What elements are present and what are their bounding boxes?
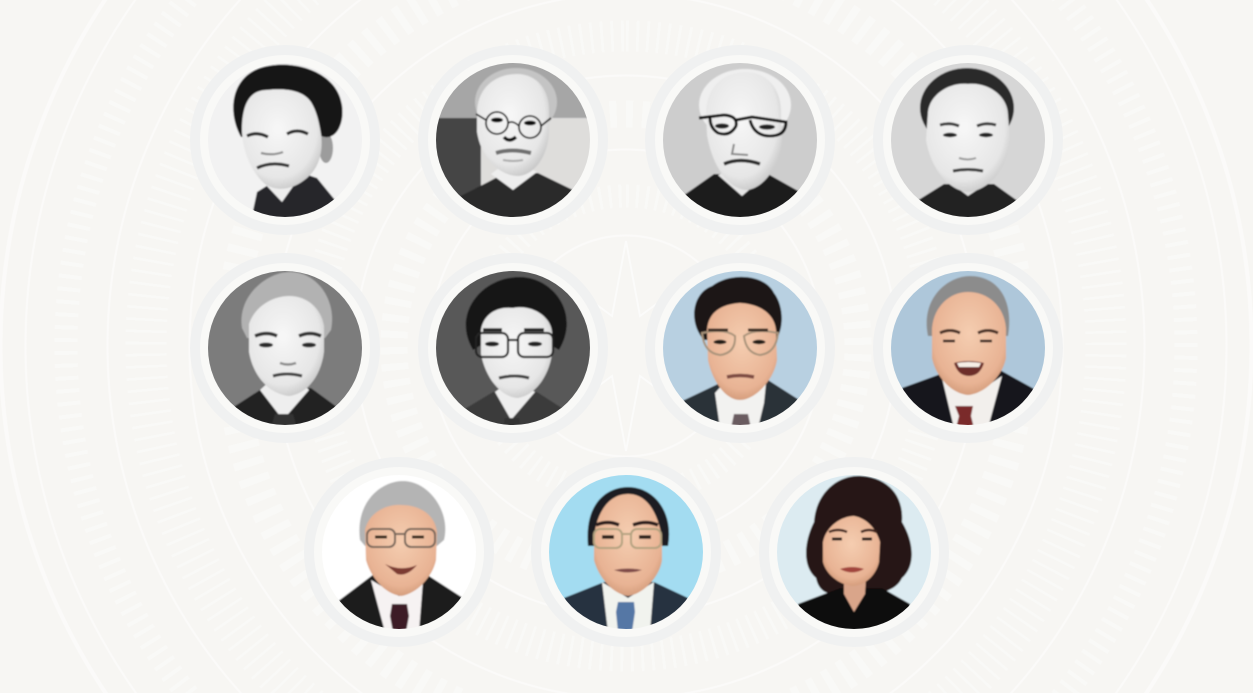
portrait 1 [195,50,375,230]
portrait 8 [878,258,1058,438]
portrait 10 [536,462,716,642]
portrait 11 [764,462,944,642]
portrait 9 [309,462,489,642]
portrait 7 [650,258,830,438]
portrait 3 [650,50,830,230]
infographic: portrait grid [190,45,1063,646]
drum centre star [521,241,731,451]
portrait 6 [423,258,603,438]
portrait 5 [195,258,375,438]
portrait 2 [423,50,603,230]
portrait 4 [878,50,1058,230]
